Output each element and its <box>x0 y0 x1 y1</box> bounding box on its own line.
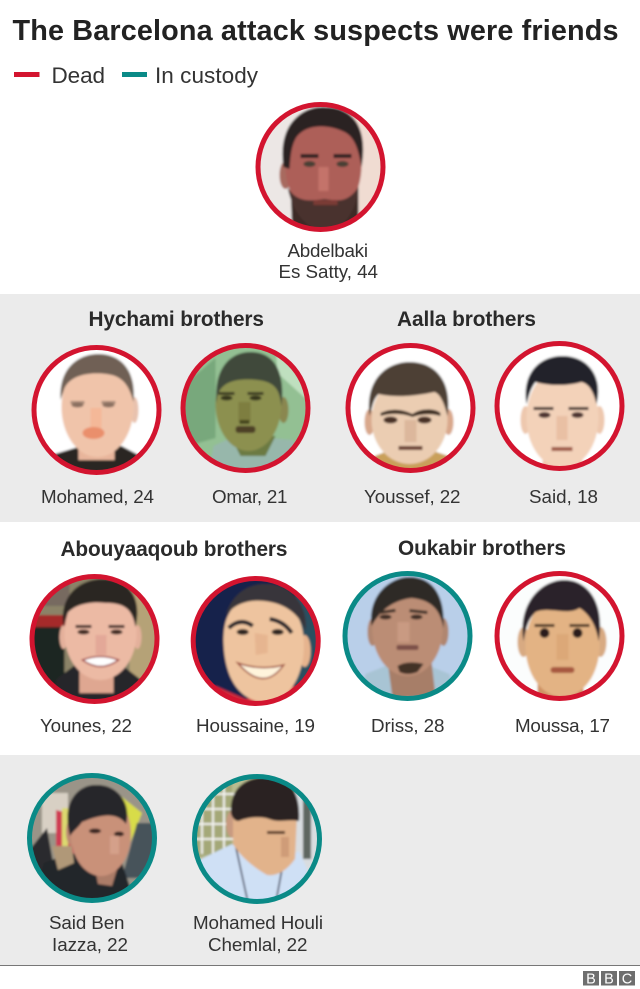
portrait: Mohamed Hychami <box>32 345 162 480</box>
name: Moussa, 17: Moussa, 17 <box>515 715 610 736</box>
name: Houssaine, 19: Houssaine, 19 <box>196 715 315 736</box>
name: Mohamed Houli Chemlal <box>193 912 323 955</box>
heading: Abouyaaqoub brothers: Abouyaaqoub brothers <box>60 538 288 561</box>
footer rule <box>0 965 640 966</box>
name: Younes, 22: Younes, 22 <box>40 715 132 736</box>
panel: Hychami and Aalla brothers band <box>0 294 640 522</box>
BBC logo: B <box>604 972 614 988</box>
name: Said Ben Iazza: Iazza, 22 <box>52 934 128 955</box>
name: Omar, 21: Omar, 21 <box>212 486 288 507</box>
portrait: Mohamed Houli Chemlal <box>192 774 322 909</box>
name: Said Ben Iazza <box>49 912 128 955</box>
name: Youssef, 22: Youssef, 22 <box>364 486 460 507</box>
portrait: Omar Hychami <box>180 343 310 478</box>
title: The Barcelona attack suspects were friends <box>12 15 618 47</box>
heading: Aalla brothers: Aalla brothers <box>397 308 536 331</box>
portrait: Moussa Oukabir <box>494 571 624 706</box>
BBC logo <box>583 971 635 988</box>
BBC logo: B <box>586 972 596 988</box>
name: Mohamed, 24: Mohamed, 24 <box>41 486 154 507</box>
legend swatch: dead <box>14 72 40 77</box>
portrait: Abdelbaki Es Satty <box>256 102 386 237</box>
heading: Oukabir brothers: Oukabir brothers <box>398 537 566 560</box>
name: Abdelbaki Es Satty <box>278 240 378 282</box>
name: Mohamed Houli Chemlal: Chemlal, 22 <box>208 934 308 955</box>
name: Mohamed Houli Chemlal: Mohamed Houli <box>193 912 323 933</box>
BBC logo: C <box>622 972 632 988</box>
name: Abdelbaki Es Satty: Es Satty, 44 <box>278 261 378 282</box>
legend label: in custody: In custody <box>155 63 259 88</box>
name: Driss, 28: Driss, 28 <box>371 715 444 736</box>
name: Said, 18: Said, 18 <box>529 486 598 507</box>
legend label: dead: Dead <box>52 63 105 88</box>
portrait: Said Aalla <box>494 341 624 476</box>
name: Abdelbaki Es Satty: Abdelbaki <box>288 240 368 261</box>
legend <box>14 63 259 88</box>
panel: remaining suspects band <box>0 755 640 965</box>
portrait: Houssaine Abouyaaqoub <box>191 576 321 711</box>
name: Said Ben Iazza: Said Ben <box>49 912 124 933</box>
portrait: Said Ben Iazza <box>27 773 157 908</box>
portrait: Youssef Aalla <box>346 343 476 478</box>
legend swatch: in custody <box>122 72 147 77</box>
heading: Hychami brothers: Hychami brothers <box>88 308 264 331</box>
portrait: Driss Oukabir <box>342 571 472 706</box>
portrait: Younes Abouyaaqoub <box>30 574 160 709</box>
